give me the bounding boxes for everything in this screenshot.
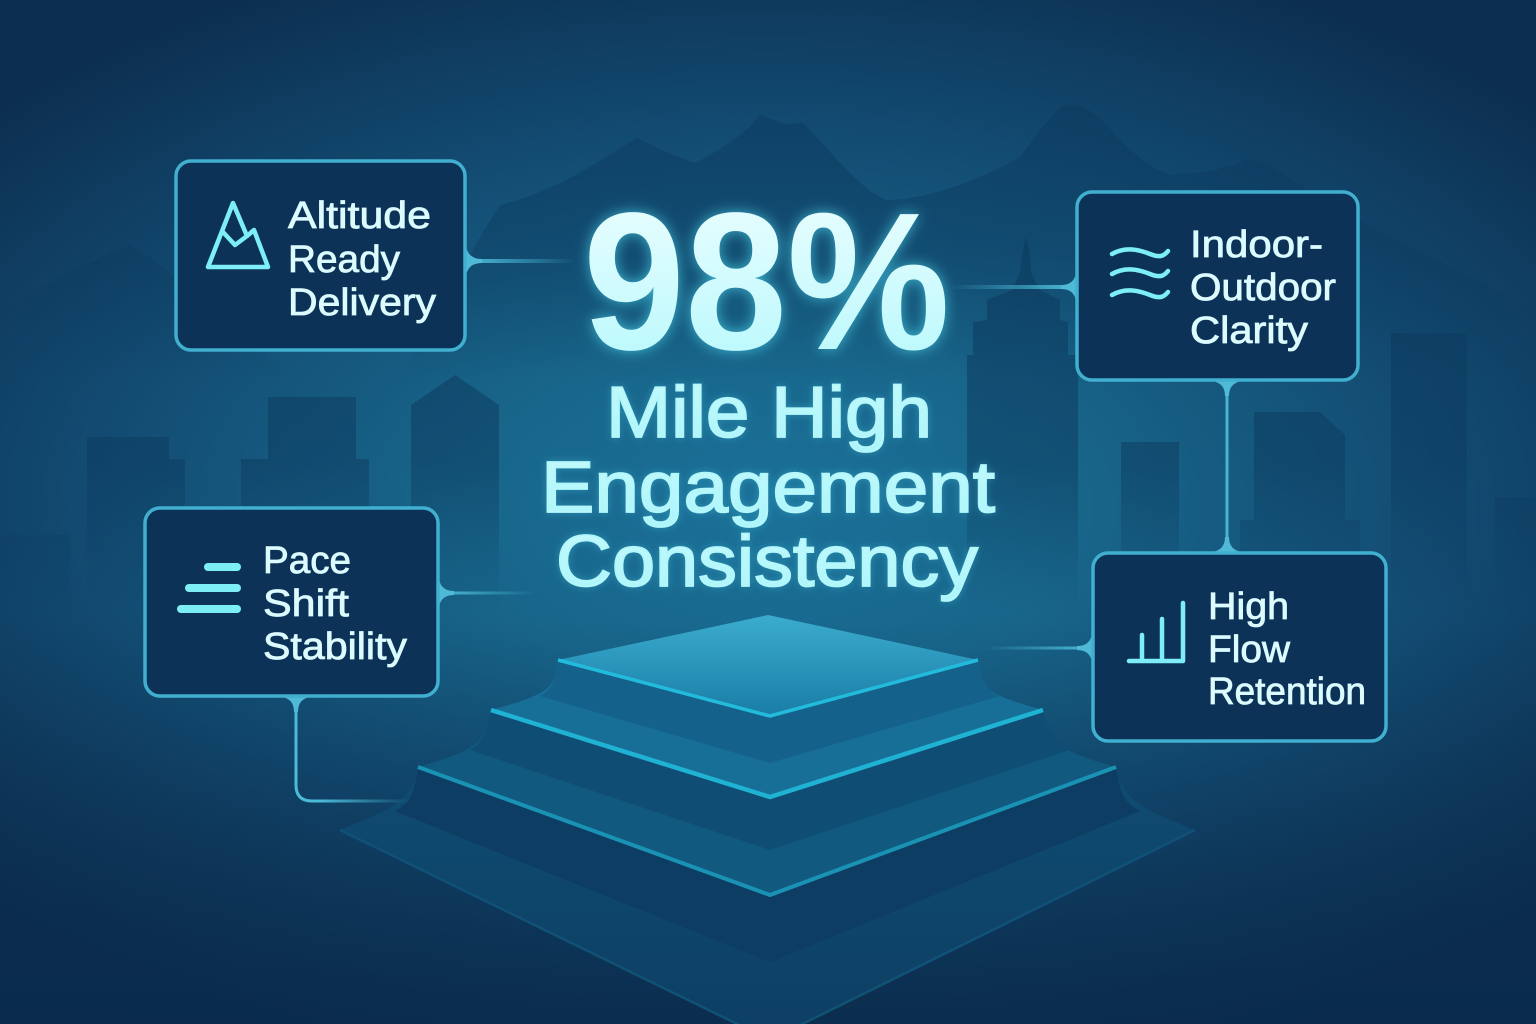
label: Pace Shift Stability: Shift: [263, 583, 349, 625]
connector: high flow to podium: [985, 646, 1092, 650]
podium tier 2 surface: [491, 615, 1043, 799]
label: Altitude Ready Delivery: Ready: [288, 239, 400, 281]
connector: pace to podium: [296, 697, 410, 801]
panel: High Flow Retention: [1093, 553, 1386, 741]
heading: Mile High Engagement Consistency: Engagement: [541, 448, 995, 528]
podium tier 2 edge: [491, 710, 1043, 797]
icon: mountain: [208, 203, 268, 267]
panel: Pace Shift Stability: [145, 508, 438, 696]
mountain silhouettes: [0, 105, 1536, 380]
label: Pace Shift Stability: Stability: [263, 626, 407, 668]
label: Pace Shift Stability: [263, 540, 407, 668]
label: Altitude Ready Delivery: Delivery: [288, 282, 436, 324]
podium tier 3 surface: [418, 660, 1116, 897]
label: High Flow Retention: High: [1208, 586, 1289, 628]
connector: altitude to headline: [466, 259, 575, 263]
label: Indoor-Outdoor Clarity: [1190, 224, 1336, 352]
icon: stacked pace bars: [181, 567, 237, 609]
icon: waves: [1112, 249, 1168, 297]
podium top edge: [558, 660, 978, 716]
podium tier 1 wall: [540, 640, 1000, 763]
podium: layered stepped platform: [340, 615, 1195, 1024]
icon: bar chart: [1129, 603, 1183, 661]
label: High Flow Retention: [1208, 586, 1366, 713]
heading: Mile High Engagement Consistency: Consistency: [556, 522, 978, 602]
podium tier 3 edge: [418, 767, 1116, 895]
label: Altitude Ready Delivery: [288, 195, 436, 324]
label: Indoor-Outdoor Clarity: Clarity: [1190, 310, 1308, 352]
podium tier 3 wall: [395, 700, 1140, 962]
background lower shading: [0, 620, 1536, 1024]
connector flares: [282, 246, 1242, 712]
heading: Mile High Engagement Consistency: Mile High: [606, 373, 932, 453]
label: Indoor-Outdoor Clarity: Outdoor: [1190, 267, 1336, 309]
label: High Flow Retention: Flow: [1208, 629, 1291, 671]
panel: Indoor-Outdoor Clarity: [1077, 192, 1358, 380]
label: Indoor-Outdoor Clarity: Indoor-: [1190, 224, 1323, 266]
heading: Mile High Engagement Consistency: [541, 373, 995, 602]
connector: pace to headline: [439, 592, 535, 594]
podium top face: [558, 615, 978, 718]
label: High Flow Retention: Retention: [1208, 671, 1366, 713]
city skyline silhouettes: [0, 236, 1536, 640]
podium tier 4 surface: [340, 700, 1195, 1024]
connector: indoor to headline: [950, 285, 1076, 289]
label: Pace Shift Stability: Pace: [263, 540, 351, 582]
headline metric: 98%: 98%: [583, 172, 950, 391]
connector: indoor to high flow: [1226, 381, 1228, 552]
label: Altitude Ready Delivery: Altitude: [288, 195, 431, 237]
connector lines: [296, 261, 1227, 801]
panel: Altitude Ready Delivery: [176, 161, 465, 350]
podium tier 2 wall: [470, 660, 1070, 850]
podium tier 4 edge glow: [340, 830, 1195, 1024]
